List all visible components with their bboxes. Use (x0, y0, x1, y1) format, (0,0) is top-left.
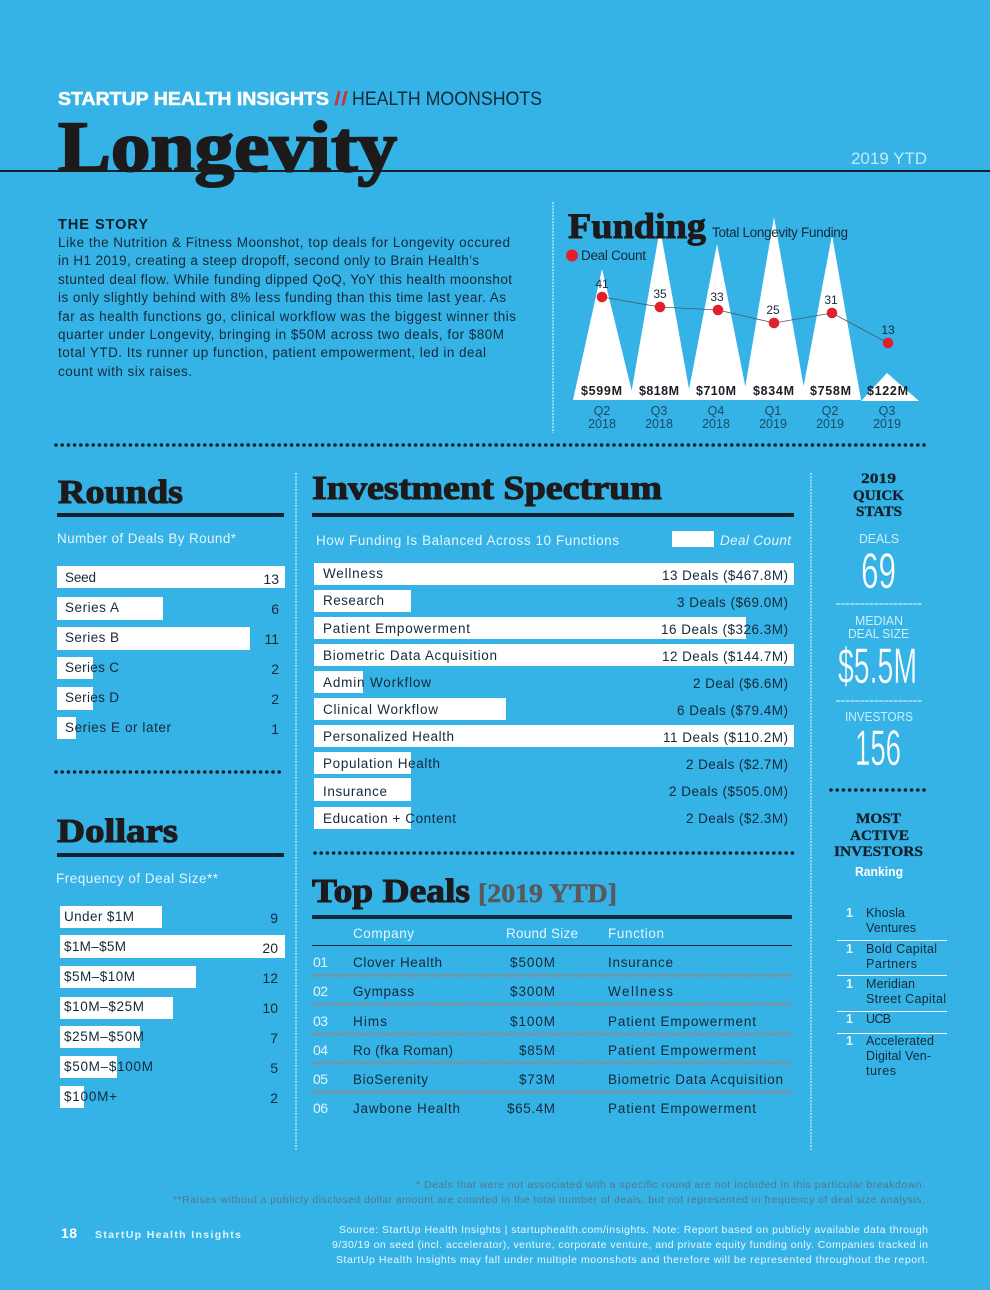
deal count values: 35 (653, 287, 667, 301)
bar chart: functions: Patient Empowerment (323, 621, 470, 636)
panel: most active investors (834, 811, 947, 1078)
text block: the story: in H1 2019, creating a steep dropoff, second only to Brain Health’s (58, 253, 479, 268)
bar chart: functions: 2 Deal ($6.6M) (693, 676, 788, 691)
ranked investor list: Accelerated (866, 1034, 934, 1048)
bar chart: functions: 13 Deals ($467.8M) (662, 568, 788, 583)
table rows: 01 (313, 954, 328, 970)
deal count values: 33 (710, 290, 724, 304)
stat: median deal size (838, 614, 917, 694)
stat: deals (859, 532, 899, 599)
stat: deals: DEALS (859, 532, 899, 546)
bar chart: rounds (57, 566, 285, 739)
bar chart: dollars: 7 (270, 1030, 278, 1046)
heading: top deals: Top Deals (312, 873, 470, 910)
text block: the story: far as health functions go, clinical workflow was the biggest winner this (58, 309, 516, 324)
ranked investor list: Digital Ven- (866, 1049, 931, 1063)
stat: investors (845, 710, 913, 776)
table header: Company (353, 926, 414, 941)
bar chart: functions: Personalized Health (323, 729, 454, 744)
bar chart: dollars (60, 906, 285, 1108)
heading: most active investors: INVESTORS (834, 844, 923, 860)
table rows: Ro (fka Roman) (353, 1043, 453, 1058)
funding values: $122M (867, 384, 908, 398)
panel: funding chart (566, 206, 919, 431)
bar chart: rounds: 13 (263, 571, 279, 587)
ranked investor list: 1 (846, 1034, 853, 1048)
heading: funding: Funding (568, 206, 706, 246)
bar chart: functions: 6 Deals ($79.4M) (677, 703, 788, 718)
date label: 2019 YTD (851, 149, 927, 168)
stat: median deal size: DEAL SIZE (848, 627, 909, 641)
deal count values: 13 (881, 323, 895, 337)
quarter axis labels: Q1 (765, 404, 781, 418)
table rows: Patient Empowerment (608, 1014, 756, 1029)
table rows: Hims (353, 1014, 387, 1029)
kicker: STARTUP HEALTH INSIGHTS (58, 89, 329, 109)
bar chart: dollars: 10 (262, 1000, 278, 1016)
heading: quick stats (853, 471, 904, 520)
bar chart: dollars: $25M–$50M (64, 1029, 144, 1044)
bar chart: functions: 2 Deals ($2.7M) (686, 757, 788, 772)
line: deal count (597, 292, 893, 348)
bar chart: dollars: $1M–$5M (64, 939, 126, 954)
heading: most active investors: MOST (856, 811, 901, 827)
footnotes (173, 1179, 925, 1206)
ranked investor list: Street Capital (866, 992, 946, 1006)
bar chart: rounds: Series D (65, 690, 119, 705)
subheading: Frequency of Deal Size** (56, 871, 219, 886)
legend: deal count: Deal Count (720, 533, 792, 548)
quarter axis labels: 2018 (702, 417, 730, 431)
table rows: 02 (313, 983, 328, 999)
table rows: Wellness (608, 984, 673, 999)
quarter axis labels: 2018 (588, 417, 616, 431)
footer label: StartUp Health Insights (95, 1229, 241, 1241)
quarter axis labels: 2019 (759, 417, 787, 431)
bar chart: functions (314, 563, 794, 829)
stat: median deal size: MEDIAN (855, 614, 903, 628)
table rows: 05 (313, 1071, 328, 1087)
table rows: 03 (313, 1013, 328, 1029)
bar chart: functions: Biometric Data Acquisition (323, 648, 497, 663)
bar chart: dollars: 12 (262, 970, 278, 986)
subheading: Number of Deals By Round* (57, 531, 237, 546)
kicker: HEALTH MOONSHOTS (352, 89, 542, 110)
kicker (58, 89, 542, 110)
bar chart: rounds: Seed (65, 570, 96, 585)
legend: total funding: Total Longevity Funding (712, 225, 848, 240)
header (0, 89, 990, 187)
stat: investors: INVESTORS (845, 710, 913, 724)
source note: StartUp Health Insights may fall under multiple moonshots and therefore will be represented throughout the report. (336, 1254, 928, 1266)
bar chart: rounds: 1 (271, 721, 279, 737)
page number: 18 (61, 1225, 77, 1241)
stat: investors: 156 (855, 720, 901, 776)
stat: deals: 69 (861, 543, 896, 599)
table rows: Insurance (608, 955, 673, 970)
quarter axis labels: 2019 (816, 417, 844, 431)
text block: the story: Like the Nutrition & Fitness Moonshot, top deals for Longevity occured (58, 235, 510, 250)
funding values (581, 384, 908, 398)
ranked investor list: UCB (866, 1012, 891, 1026)
bar chart: functions: Education + Content (323, 811, 456, 826)
ranked investor list: 1 (846, 942, 853, 956)
table rows: $500M (510, 955, 555, 970)
text block: the story: THE STORY (58, 217, 148, 233)
bar chart: rounds: 2 (271, 661, 279, 677)
ranked investor list: Partners (866, 957, 917, 971)
quarter axis labels: Q4 (708, 404, 724, 418)
bar chart: dollars: $50M–$100M (64, 1059, 153, 1074)
text block: the story: is only slightly behind with 8% less funding than this time last year. As (58, 290, 506, 305)
table rows: $100M (510, 1014, 555, 1029)
table rows: Biometric Data Acquisition (608, 1072, 783, 1087)
bar chart: dollars: $5M–$10M (64, 969, 135, 984)
ranked investor list: 1 (846, 1012, 853, 1026)
heading: dollars: Dollars (57, 813, 178, 850)
table rows: Jawbone Health (353, 1101, 460, 1116)
funding values: $599M (581, 384, 622, 398)
subheading: ranking: Ranking (855, 865, 903, 879)
quarter axis labels: Q3 (651, 404, 667, 418)
heading: top deals: [2019 YTD] (478, 879, 617, 908)
text block: the story: total YTD. Its runner up function, patient empowerment, led in deal (58, 345, 486, 360)
panel: rounds (57, 474, 285, 739)
heading: most active investors: ACTIVE (850, 828, 909, 844)
bar chart: rounds: Series A (65, 600, 119, 615)
funding values: $758M (810, 384, 851, 398)
funding values: $710M (696, 384, 736, 398)
table rows: $300M (510, 984, 555, 999)
bar chart: functions: Wellness (323, 566, 383, 581)
table rows: BioSerenity (353, 1072, 428, 1087)
table rows: Gympass (353, 984, 414, 999)
ranked investor list: Ventures (866, 921, 916, 935)
quarter axis labels: Q3 (879, 404, 895, 418)
quarter axis labels: 2019 (873, 417, 901, 431)
quarter axis labels: 2018 (645, 417, 673, 431)
bar chart: functions: 16 Deals ($326.3M) (661, 622, 788, 637)
bar chart: functions: Clinical Workflow (323, 702, 438, 717)
bar chart: rounds: Series C (65, 660, 119, 675)
heading: rounds: Rounds (58, 474, 183, 511)
bar chart: dollars: $10M–$25M (64, 999, 144, 1014)
text block: the story: quarter under Longevity, bringing in $50M across two deals, for $80M (58, 327, 504, 342)
ranked investor list (837, 906, 947, 1078)
kicker: // (334, 89, 349, 110)
quarter axis labels: Q2 (822, 404, 838, 418)
table header: Round Size (506, 926, 578, 941)
bar chart: rounds: 2 (271, 691, 279, 707)
heading: investment spectrum: Investment Spectrum (312, 470, 662, 507)
area chart: total funding triangles (573, 217, 919, 401)
table header (353, 926, 664, 941)
footnotes: * Deals that were not associated with a specific round are not included in this particular breakdown. (416, 1179, 925, 1191)
bar chart: functions: Population Health (323, 756, 440, 771)
ranked investor list: Khosla (866, 906, 905, 920)
legend: deal count: Deal Count (581, 248, 646, 263)
bar chart: dollars: 9 (270, 910, 278, 926)
deal count values: 31 (824, 293, 838, 307)
source note: Source: StartUp Health Insights | startuphealth.com/insights. Note: Report based on publicly available data through (339, 1224, 928, 1236)
subheading: How Funding Is Balanced Across 10 Functions (316, 533, 619, 548)
deal count values (595, 277, 895, 337)
table rows: Patient Empowerment (608, 1043, 756, 1058)
bar chart: dollars: 20 (262, 940, 278, 956)
ranked investor list: tures (866, 1064, 896, 1078)
text block: the story: count with six raises. (58, 364, 192, 379)
table rows: $65.4M (507, 1101, 555, 1116)
bar chart: dollars: Under $1M (64, 909, 134, 924)
table rows: 04 (313, 1042, 328, 1058)
table rows: 06 (313, 1100, 328, 1116)
heading: quick stats: 2019 (861, 471, 896, 487)
source note (332, 1224, 928, 1266)
panel: quick stats (836, 471, 922, 776)
ranked investor list: 1 (846, 977, 853, 991)
ranked investor list: 1 (846, 906, 853, 920)
source note: 9/30/19 on seed (incl. accelerator), venture, corporate venture, and private equity funding only. Companies tracked in (332, 1239, 928, 1251)
bar chart: functions: 2 Deals ($2.3M) (686, 811, 788, 826)
title: Longevity (58, 107, 397, 187)
heading: quick stats: QUICK (853, 488, 904, 504)
panel: dollars (56, 813, 285, 1108)
table rows: Patient Empowerment (608, 1101, 756, 1116)
bar chart: rounds: Series E or later (65, 720, 172, 735)
table header: Function (608, 926, 664, 941)
heading: quick stats: STATS (856, 504, 902, 520)
quarter axis labels: Q2 (594, 404, 610, 418)
bar chart: rounds: Series B (65, 630, 119, 645)
bar chart: functions: 12 Deals ($144.7M) (662, 649, 788, 664)
table rows: Clover Health (353, 955, 442, 970)
funding values: $818M (639, 384, 679, 398)
funding values: $834M (753, 384, 794, 398)
bar chart: functions: 2 Deals ($505.0M) (669, 784, 788, 799)
ranked investor list: Meridian (866, 977, 915, 991)
quarter axis labels (588, 404, 901, 431)
text block: the story (58, 217, 516, 379)
panel: investment spectrum (312, 470, 794, 829)
heading: top deals (312, 873, 617, 910)
heading: most active investors (834, 811, 923, 860)
footnotes: **Raises without a publicly disclosed dollar amount are counted in the total number of deals, but not represented in frequency of deal size analysis. (173, 1194, 925, 1206)
bar chart: functions: 11 Deals ($110.2M) (663, 730, 788, 745)
deal count values: 25 (766, 303, 780, 317)
bar chart: rounds: 6 (271, 601, 279, 617)
table rows (313, 954, 783, 1116)
bar chart: functions: Insurance (323, 784, 387, 799)
panel: top deals (312, 873, 792, 1116)
stat: median deal size: $5.5M (838, 638, 917, 694)
bar chart: functions: Admin Workflow (323, 675, 431, 690)
legend: deal count (672, 531, 792, 548)
bar chart: functions: Research (323, 593, 384, 608)
table rows: $85M (519, 1043, 555, 1058)
deal count values: 41 (595, 277, 609, 291)
bar chart: functions: 3 Deals ($69.0M) (677, 595, 788, 610)
bar chart: rounds: 11 (264, 631, 279, 647)
table rows: $73M (519, 1072, 555, 1087)
bar chart: dollars: 5 (270, 1060, 278, 1076)
bar chart: dollars: $100M+ (64, 1089, 117, 1104)
text block: the story: stunted deal flow. While funding dipped QoQ, YoY this health moonshot (58, 272, 512, 287)
ranked investor list: Bold Capital (866, 942, 937, 956)
bar chart: dollars: 2 (270, 1090, 278, 1106)
